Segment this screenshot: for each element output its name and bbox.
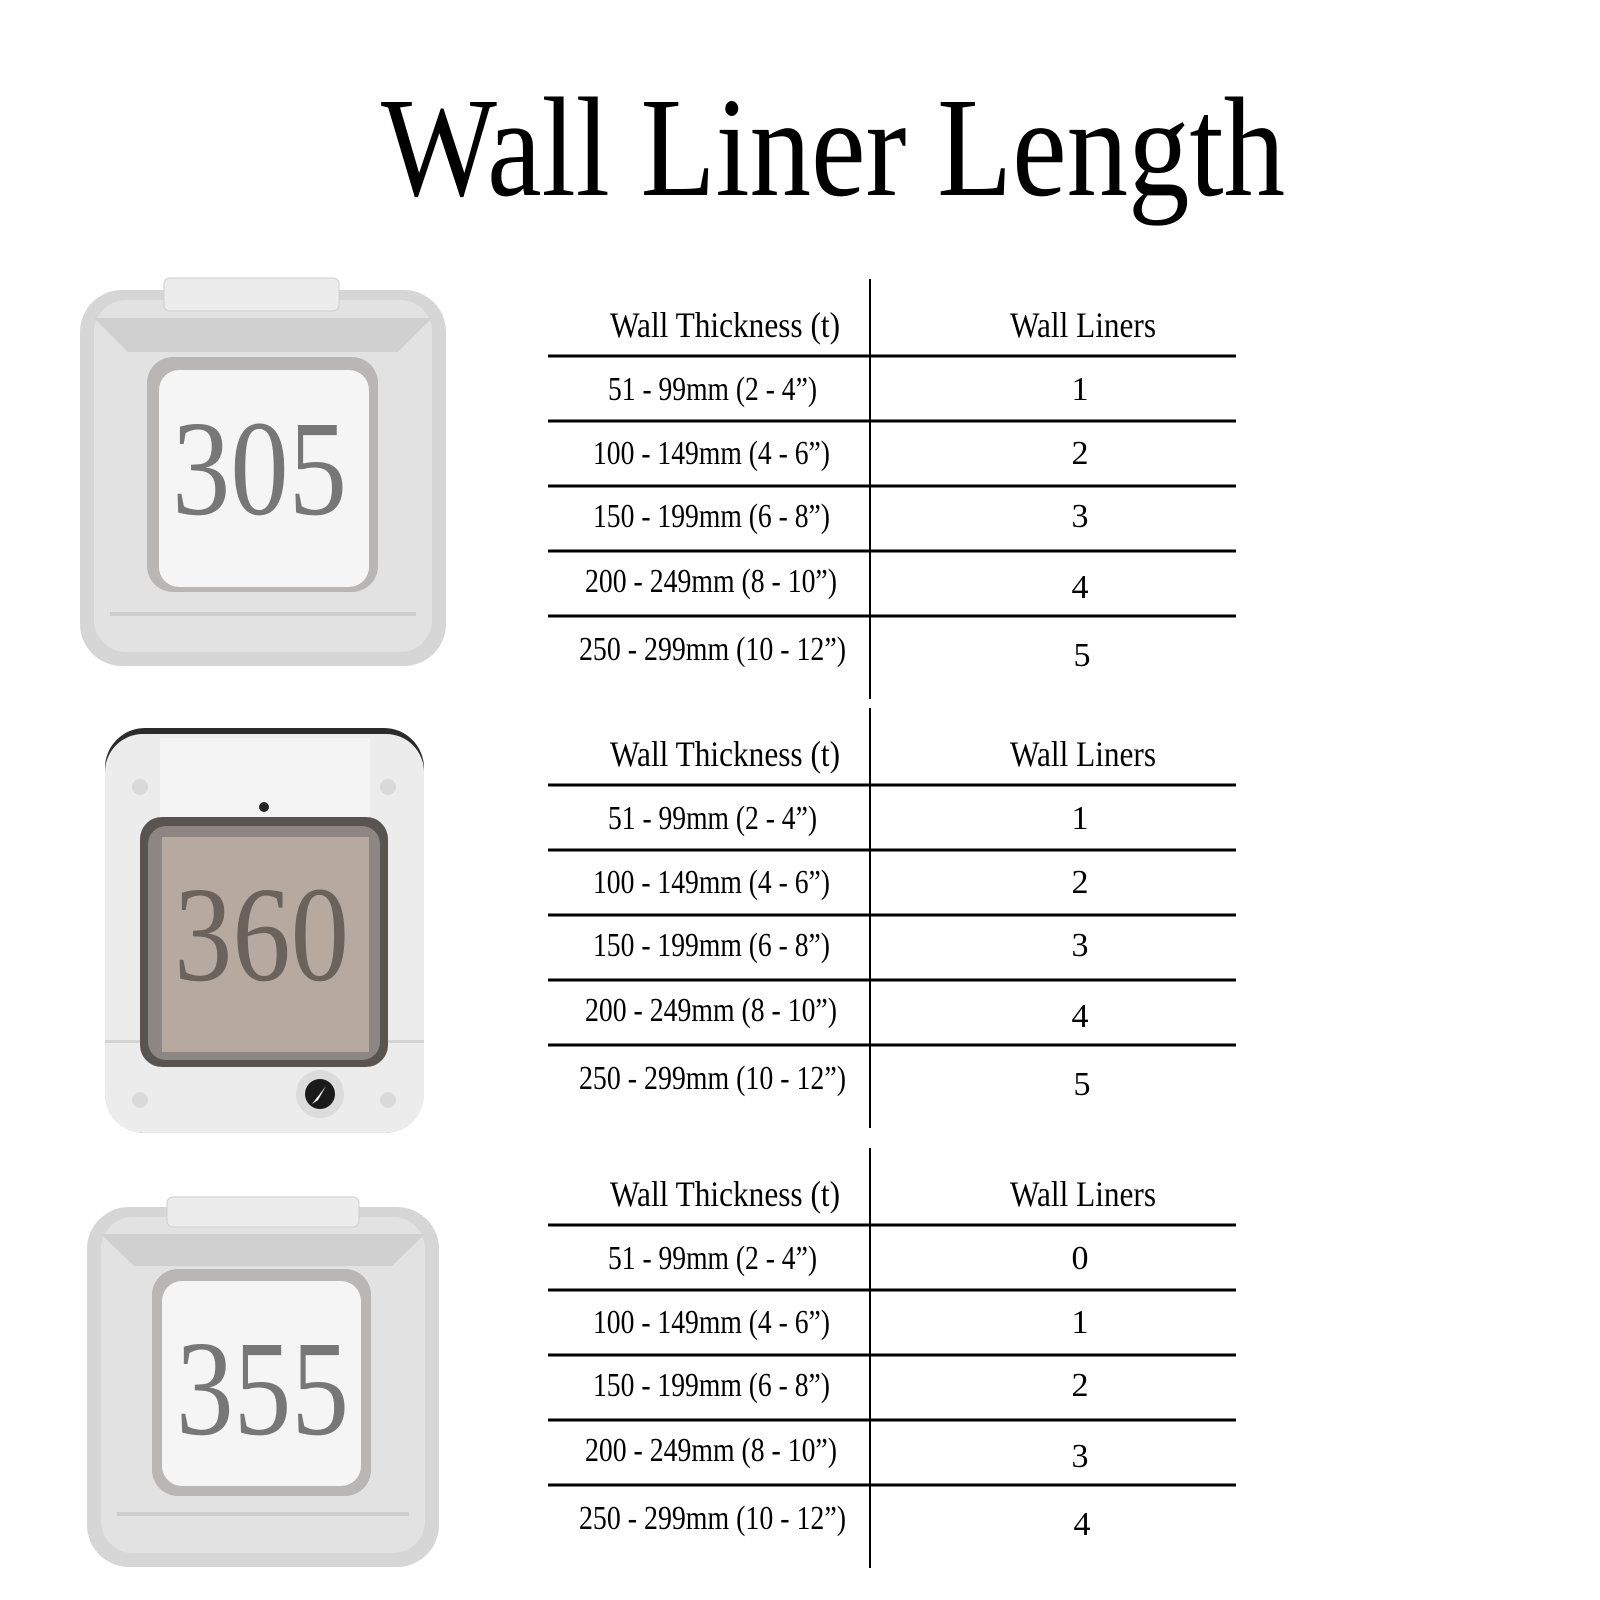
image: cat flap 355 (87, 1197, 439, 1567)
icon: dial (296, 1070, 344, 1118)
table 2: Wall Thickness (t) (610, 734, 840, 774)
table 2: 1 (1072, 800, 1088, 837)
table 2: 5 (1074, 1066, 1090, 1103)
image: cat flap 360 (105, 728, 424, 1133)
table 3: Wall Liners (1010, 1174, 1156, 1214)
table 2: Wall Liners (1010, 734, 1156, 774)
table 2 (548, 708, 1236, 1128)
table 3: 150 - 199mm (6 - 8”) (593, 1367, 830, 1404)
table 1: 3 (1072, 498, 1088, 535)
table 1: 2 (1072, 435, 1088, 472)
table 1: 5 (1074, 637, 1090, 674)
table 2: 150 - 199mm (6 - 8”) (593, 927, 830, 964)
table 1: Wall Thickness (t) (610, 305, 840, 345)
table 3: 51 - 99mm (2 - 4”) (608, 1240, 817, 1277)
table 3 (548, 1148, 1236, 1568)
table 1: 100 - 149mm (4 - 6”) (593, 435, 830, 472)
label: 305: 305 (172, 394, 347, 544)
table 3: 1 (1072, 1304, 1088, 1341)
table 1: Wall Liners (1010, 305, 1156, 345)
table 2: 3 (1072, 927, 1088, 964)
table 3: 250 - 299mm (10 - 12”) (579, 1500, 846, 1537)
title: Wall Liner Length (381, 68, 1285, 226)
table 2: 200 - 249mm (8 - 10”) (585, 992, 837, 1029)
table 2: 51 - 99mm (2 - 4”) (608, 800, 817, 837)
table 1 (548, 279, 1236, 699)
table 3: Wall Thickness (t) (610, 1174, 840, 1214)
image: cat flap 305 (80, 278, 446, 666)
label: 355: 355 (176, 1314, 349, 1464)
table 1: 150 - 199mm (6 - 8”) (593, 498, 830, 535)
table 2: 100 - 149mm (4 - 6”) (593, 864, 830, 901)
table 2: 2 (1072, 864, 1088, 901)
table 2: 250 - 299mm (10 - 12”) (579, 1060, 846, 1097)
label: 360: 360 (174, 860, 349, 1010)
table 3: 4 (1074, 1506, 1090, 1543)
table 3: 200 - 249mm (8 - 10”) (585, 1432, 837, 1469)
table 3: 100 - 149mm (4 - 6”) (593, 1304, 830, 1341)
table 2: 4 (1072, 998, 1088, 1035)
table 1: 51 - 99mm (2 - 4”) (608, 371, 817, 408)
table 3: 0 (1072, 1240, 1088, 1277)
table 1: 250 - 299mm (10 - 12”) (579, 631, 846, 668)
table 3: 2 (1072, 1367, 1088, 1404)
table 3: 3 (1072, 1438, 1088, 1475)
table 1: 1 (1072, 371, 1088, 408)
table 1: 4 (1072, 569, 1088, 606)
table 1: 200 - 249mm (8 - 10”) (585, 563, 837, 600)
